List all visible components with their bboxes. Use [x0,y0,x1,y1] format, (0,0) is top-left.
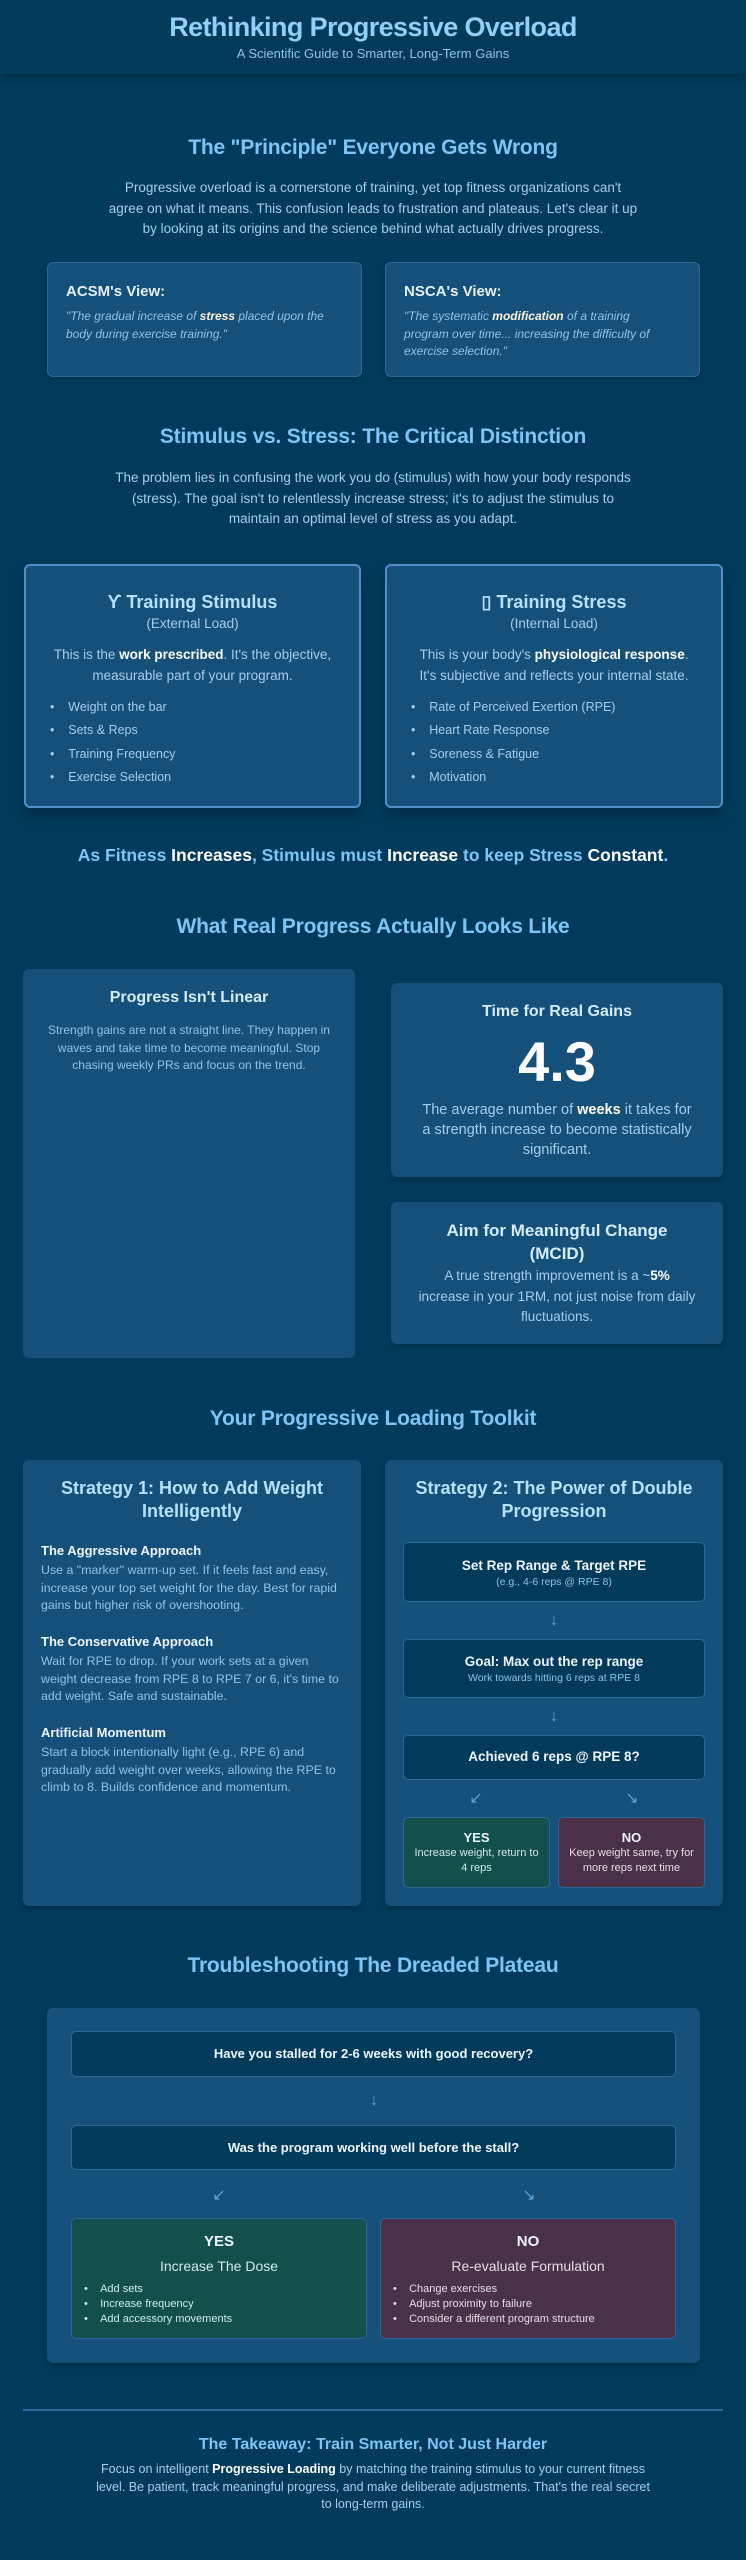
flow step 1: (e.g., 4-6 reps @ RPE 8) [496,1576,612,1588]
panel: training stimulus: ϒ Training Stimulus [108,592,277,612]
subtitle: A Scientific Guide to Smarter, Long-Term Gains [237,46,509,61]
flow step 1 [403,1542,705,1602]
panel: progress isn't linear: Progress Isn't Linear [110,989,268,1006]
flow step 2: Work towards hitting 6 reps at RPE 8 [468,1672,640,1684]
no box [558,1817,705,1888]
panel: training stimulus: • Training Frequency [50,747,176,761]
panel: training stimulus: • Exercise Selection [50,770,171,784]
heading: principle: The "Principle" Everyone Gets Wrong [188,136,558,159]
yes: increase the dose: • Add accessory movements [84,2313,232,2325]
flow step 2 [403,1639,705,1698]
flow step 2: Goal: Max out the rep range [465,1654,643,1669]
panel: training stress: • Soreness & Fatigue [411,747,539,761]
key statement: As Fitness Increases, Stimulus must Increase to keep Stress Constant. [78,845,668,865]
panel: time for real gains: significant. [523,1142,591,1158]
arrows diagonal: ↙ [212,2187,226,2204]
arrows diagonal: ↙ [469,1790,483,1807]
flow step 1: Set Rep Range & Target RPE [462,1558,646,1573]
intro paragraph: by looking at its origins and the science behind what actually drives progress. [143,221,603,236]
takeaway: to long-term gains. [321,2497,425,2511]
yes box [403,1817,550,1888]
heading: stimulus vs stress: Stimulus vs. Stress: The Critical Distinction [160,425,586,448]
question 1: Have you stalled for 2-6 weeks with good recovery? [214,2046,533,2061]
no: re-evaluate [380,2218,676,2339]
yes: increase the dose: Increase The Dose [160,2258,278,2274]
aggressive approach: gains but higher risk of overshooting. [41,1598,244,1612]
no: re-evaluate: • Adjust proximity to failure [393,2298,532,2310]
question 2: Was the program working well before the stall? [228,2140,519,2155]
yes: increase the dose: YES [204,2233,234,2250]
aggressive approach: Use a "marker" warm-up set. If it feels fast and easy, [41,1563,328,1577]
no: re-evaluate: • Consider a different program structure [393,2313,595,2325]
panel: training stimulus: • Sets & Reps [50,723,138,737]
panel: MCID: A true strength improvement is a ~5% [444,1268,670,1283]
panel: training stimulus: measurable part of your program. [92,668,293,683]
paragraph [115,470,631,526]
flow step 3: Achieved 6 reps @ RPE 8? [468,1749,640,1764]
arrow down: ↓ [550,1708,558,1725]
panel: MCID: Aim for Meaningful Change [446,1221,668,1240]
aggressive approach: increase your top set weight for the day. Best for rapid [41,1580,337,1594]
panel: ACSM view: "The gradual increase of stress placed upon the body during exercise training." [66,309,324,340]
conservative approach: add weight. Safe and sustainable. [41,1689,227,1703]
panel: NSCA view: NSCA's View: [404,283,502,300]
artificial momentum: gradually add weight over weeks, allowing the RPE to [41,1762,336,1776]
panel: training stress: This is your body's physiological response. [420,647,688,662]
panel: strategy 2: Strategy 2: The Power of Double Progression [415,1478,693,1521]
panel: training stimulus: (External Load) [146,616,239,631]
heading: real progress: What Real Progress Actually Looks Like [176,915,570,938]
intro paragraph: agree on what it means. This confusion leads to frustration and plateaus. Let's clear it up [109,200,637,216]
conservative approach: weight decrease from RPE 8 to RPE 7 or 6, it's time to [41,1672,339,1686]
no: re-evaluate: • Change exercises [393,2283,497,2295]
panel: plateau flowchart [47,2008,700,2363]
heading: plateau: Troubleshooting The Dreaded Plateau [187,1954,559,1977]
question 1 [71,2031,676,2077]
big stat: 4.3 [518,1030,596,1093]
panel: training stress: ▯ Training Stress [482,592,626,612]
panel: strategy 1: Strategy 1: How to Add Weight Intelligently [61,1478,323,1521]
no box: Keep weight same, try for more reps next time [569,1847,694,1874]
paragraph: (stress). The goal isn't to relentlessly increase stress; it's to adjust the stimulus to [132,490,614,506]
aggressive approach [41,1543,337,1612]
panel: training stress: • Motivation [411,770,486,784]
panel: training stress: • Heart Rate Response [411,723,549,737]
intro paragraph [109,180,637,236]
panel: progress isn't linear: chasing weekly PRs and focus on the trend. [72,1058,306,1072]
flow step 3 [403,1735,705,1780]
panel: progress isn't linear: Strength gains are not a straight line. They happen in [48,1023,330,1037]
panel: training stress: It's subjective and reflects your internal state. [420,668,688,683]
yes box: Increase weight, return to 4 reps [414,1847,539,1874]
question 2 [71,2125,676,2170]
panel: MCID [391,1202,723,1344]
artificial momentum: Start a block intentionally light (e.g., RPE 6) and [41,1745,304,1759]
panel: MCID: increase in your 1RM, not just noise from daily [419,1288,695,1304]
takeaway: Focus on intelligent Progressive Loading by matching the training stimulus to your current fitness [101,2462,645,2476]
panel: time for real gains: a strength increase to become statistically [422,1122,692,1138]
panel: training stimulus [24,564,361,808]
artificial momentum: Artificial Momentum [41,1725,166,1740]
panel: training stimulus: This is the work prescribed. It's the objective, [54,647,331,662]
panel: training stress [385,564,723,808]
no: re-evaluate: NO [517,2233,539,2250]
takeaway [96,2436,650,2511]
panel: training stress: (Internal Load) [510,616,598,631]
no box: NO [622,1830,641,1845]
takeaway: level. Be patient, track meaningful progress, and make deliberate adjustments. That's the real secret [96,2480,650,2494]
text: ↘ [625,1790,639,1807]
yes: increase the dose: • Increase frequency [84,2298,194,2310]
intro paragraph: Progressive overload is a cornerstone of training, yet top fitness organizations can't [125,180,621,195]
conservative approach: The Conservative Approach [41,1634,213,1649]
conservative approach [41,1634,339,1703]
panel: progress isn't linear: waves and take time to become meaningful. Stop [58,1040,320,1054]
yes: increase the dose: • Add sets [84,2283,143,2295]
no: re-evaluate: Re-evaluate Formulation [451,2258,605,2274]
artificial momentum: climb to 8. Builds confidence and momentum. [41,1780,291,1794]
panel: NSCA view [385,262,700,377]
title: Rethinking Progressive Overload [169,12,577,42]
conservative approach: Wait for RPE to drop. If your work sets at a given [41,1654,308,1668]
text: ↘ [522,2187,536,2204]
arrow down: ↓ [550,1612,558,1629]
panel: time for real gains [391,983,723,1177]
takeaway: The Takeaway: Train Smarter, Not Just Harder [199,2436,547,2453]
yes box: YES [463,1830,490,1845]
panel: strategy 2 [385,1460,723,1906]
panel: ACSM view: ACSM's View: [66,283,165,300]
aggressive approach: The Aggressive Approach [41,1543,201,1558]
arrow down: ↓ [370,2092,378,2109]
panel: progress isn't linear [23,969,355,1358]
panel: MCID: (MCID) [530,1244,584,1263]
panel: strategy 1 [23,1460,361,1906]
panel: NSCA view: "The systematic modification of a training program over time... increasing the difficulty of exercise selection." [404,309,649,358]
panel: MCID: fluctuations. [521,1309,593,1324]
yes: increase the dose [71,2218,367,2339]
artificial momentum [41,1725,336,1794]
paragraph: The problem lies in confusing the work you do (stimulus) with how your body responds [115,470,631,485]
panel: training stimulus: • Weight on the bar [50,700,167,714]
paragraph: maintain an optimal level of stress as you adapt. [229,511,517,526]
panel: ACSM view [47,262,362,377]
panel: time for real gains: Time for Real Gains [482,1003,632,1020]
panel: training stress: • Rate of Perceived Exertion (RPE) [411,700,615,714]
panel: time for real gains: The average number of weeks it takes for [422,1102,692,1118]
header [0,0,746,74]
heading: toolkit: Your Progressive Loading Toolkit [210,1407,536,1430]
